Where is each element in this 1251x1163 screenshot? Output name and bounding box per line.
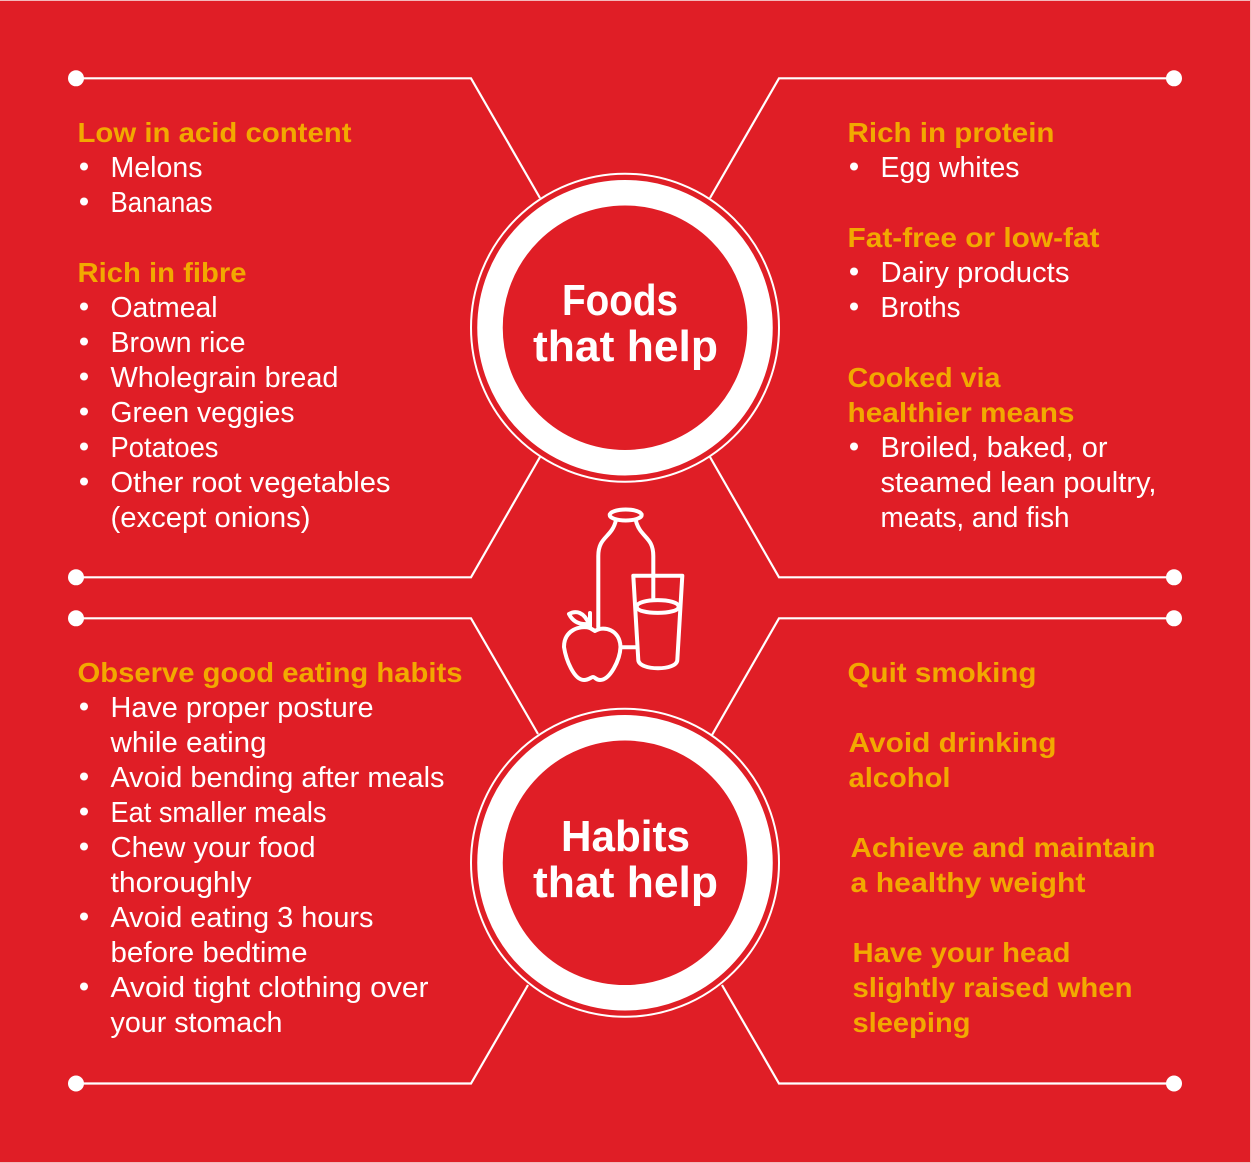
icon: bottle, glass and apple <box>564 510 682 680</box>
text block: habits left: Chew your food <box>110 832 316 864</box>
text block: foods left: Green veggies <box>110 397 294 429</box>
text block: foods right: steamed lean poultry, <box>880 467 1156 499</box>
circle: foods that help: Foods <box>562 276 678 325</box>
text block: habits right: Have your head <box>852 937 1070 968</box>
text block: foods left: Other root vegetables <box>110 467 390 499</box>
text block: habits left: your stomach <box>110 1007 282 1039</box>
circle: habits that help: that help <box>533 858 718 907</box>
text block: foods right: healthier means <box>848 397 1074 428</box>
text block: foods right: Broths <box>880 292 960 324</box>
text block: habits left: Observe good eating habits <box>78 657 463 688</box>
text block: habits right: slightly raised when <box>852 972 1132 1003</box>
text block: foods right: Broiled, baked, or <box>880 432 1108 464</box>
text block: foods right: Dairy products <box>880 257 1070 289</box>
connector: foods top left <box>68 70 540 198</box>
text block: habits right: Quit smoking <box>848 657 1036 688</box>
circle: foods that help <box>471 174 779 482</box>
text block: foods right: Fat-free or low-fat <box>848 222 1100 253</box>
text block: habits left: thoroughly <box>110 867 252 899</box>
text block: habits left: Have proper posture <box>110 692 374 724</box>
text block: foods right: Cooked via <box>848 362 1001 393</box>
connector: habits bottom left <box>68 985 528 1092</box>
text block: habits left: Eat smaller meals <box>110 797 326 829</box>
text block: foods left: (except onions) <box>110 502 310 534</box>
text block: habits left: Avoid bending after meals <box>110 762 444 794</box>
text block: habits right: Achieve and maintain <box>850 832 1156 863</box>
text block: habits left: Avoid tight clothing over <box>110 972 429 1004</box>
text block: habits right: sleeping <box>852 1007 970 1038</box>
text block: foods left: Low in acid content <box>78 117 352 148</box>
circle: habits that help: Habits <box>561 812 690 861</box>
connector: habits top right <box>712 610 1182 735</box>
text block: habits right: alcohol <box>848 762 950 793</box>
text block: habits left: before bedtime <box>110 937 308 969</box>
circle: foods that help: that help <box>533 322 718 371</box>
text block: foods right: meats, and fish <box>880 502 1070 534</box>
text block: foods left <box>78 117 390 534</box>
text block: foods right <box>848 117 1156 534</box>
circle: habits that help <box>471 709 779 1017</box>
text block: foods left: Bananas <box>110 187 212 219</box>
connector: habits top left <box>68 610 538 734</box>
text block: foods left: Brown rice <box>110 327 246 359</box>
text block: habits right: a healthy weight <box>850 867 1086 898</box>
text block: habits left: Avoid eating 3 hours <box>110 902 374 934</box>
text block: foods left: Oatmeal <box>110 292 218 324</box>
text block: foods right: Egg whites <box>880 152 1020 184</box>
connector: foods bottom left <box>68 457 540 585</box>
text block: habits left <box>78 657 463 1039</box>
text block: foods left: Potatoes <box>110 432 218 464</box>
text block: foods left: Rich in fibre <box>78 257 246 288</box>
connector: foods bottom right <box>710 457 1182 585</box>
connector: habits bottom right <box>722 985 1182 1092</box>
text block: habits right <box>848 657 1156 1038</box>
text block: foods left: Melons <box>110 152 202 184</box>
text block: habits right: Avoid drinking <box>848 727 1056 758</box>
text block: habits left: while eating <box>109 727 266 759</box>
text block: foods left: Wholegrain bread <box>110 362 338 394</box>
text block: foods right: Rich in protein <box>848 117 1054 148</box>
connector: foods top right <box>710 70 1182 198</box>
